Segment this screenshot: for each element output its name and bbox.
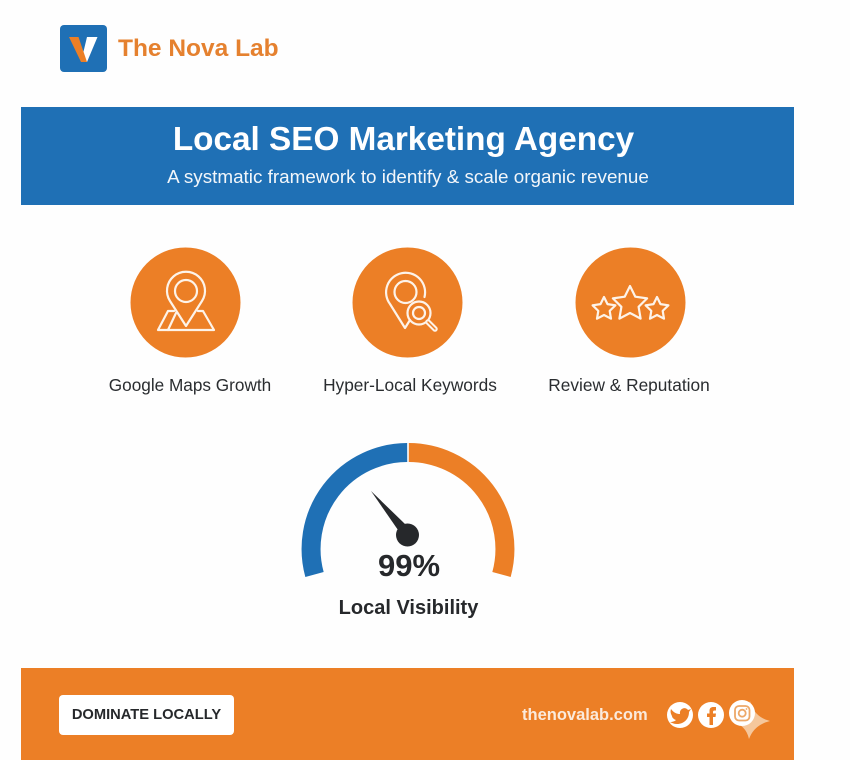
footer band bbox=[21, 668, 794, 760]
subtitle: A systmatic framework to identify & scale organic revenue bbox=[167, 166, 649, 187]
icon: facebook bbox=[698, 702, 724, 728]
gauge: local visibility bbox=[302, 443, 514, 619]
label: Review & Reputation bbox=[548, 375, 710, 395]
title: Local SEO Marketing Agency bbox=[173, 121, 634, 158]
label: Hyper-Local Keywords bbox=[323, 375, 497, 395]
gauge chart bbox=[302, 443, 514, 577]
call to action button: DOMINATE LOCALLY bbox=[72, 707, 221, 723]
icon: map pin bbox=[130, 248, 240, 358]
call to action button bbox=[59, 695, 234, 735]
icon: instagram bbox=[729, 700, 755, 726]
logo icon bbox=[60, 25, 107, 72]
gauge value: 99% bbox=[378, 548, 440, 583]
icon: pin with magnifier bbox=[352, 248, 462, 358]
logo bbox=[60, 25, 279, 72]
gauge label: Local Visibility bbox=[339, 597, 478, 619]
sparkle bbox=[731, 701, 770, 739]
icon: twitter bbox=[667, 702, 693, 728]
feature: Review & Reputation bbox=[548, 248, 710, 395]
feature: Google Maps Growth bbox=[109, 248, 271, 395]
title banner bbox=[21, 107, 794, 205]
blue arc bbox=[311, 452, 407, 574]
feature: Hyper-Local Keywords bbox=[323, 248, 497, 395]
website: thenovalab.com bbox=[522, 706, 648, 724]
label: Google Maps Growth bbox=[109, 375, 271, 395]
orange arc bbox=[409, 452, 505, 574]
logo wordmark: The Nova Lab bbox=[118, 35, 279, 62]
social icons bbox=[667, 700, 770, 739]
icon: three stars bbox=[576, 248, 686, 358]
needle bbox=[371, 491, 419, 546]
